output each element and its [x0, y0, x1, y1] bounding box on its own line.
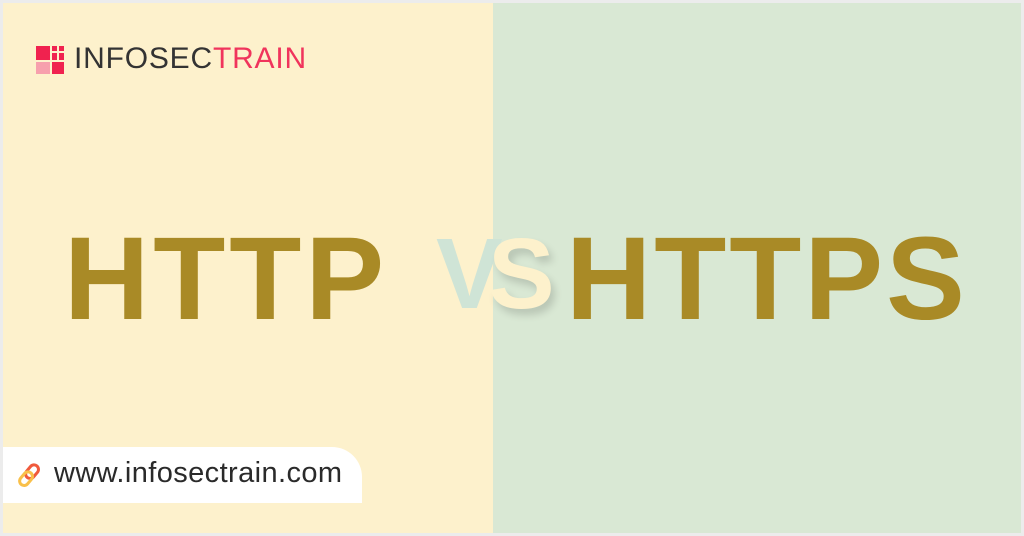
website pill	[3, 447, 362, 503]
heading: vs: S	[488, 218, 555, 330]
heading: HTTPS: HTTPS	[566, 213, 968, 345]
icon: link	[18, 463, 40, 487]
heading: vs	[436, 218, 558, 330]
heading: HTTP: HTTP	[64, 213, 388, 345]
logo text: INFOSECTRAIN	[74, 42, 307, 75]
panel: left cream	[3, 3, 493, 533]
panel: right green	[493, 3, 1021, 533]
heading: vs: V	[436, 218, 503, 330]
icon: logo squares	[36, 46, 64, 74]
logo	[36, 42, 307, 75]
website text: www.infosectrain.com	[54, 457, 342, 489]
